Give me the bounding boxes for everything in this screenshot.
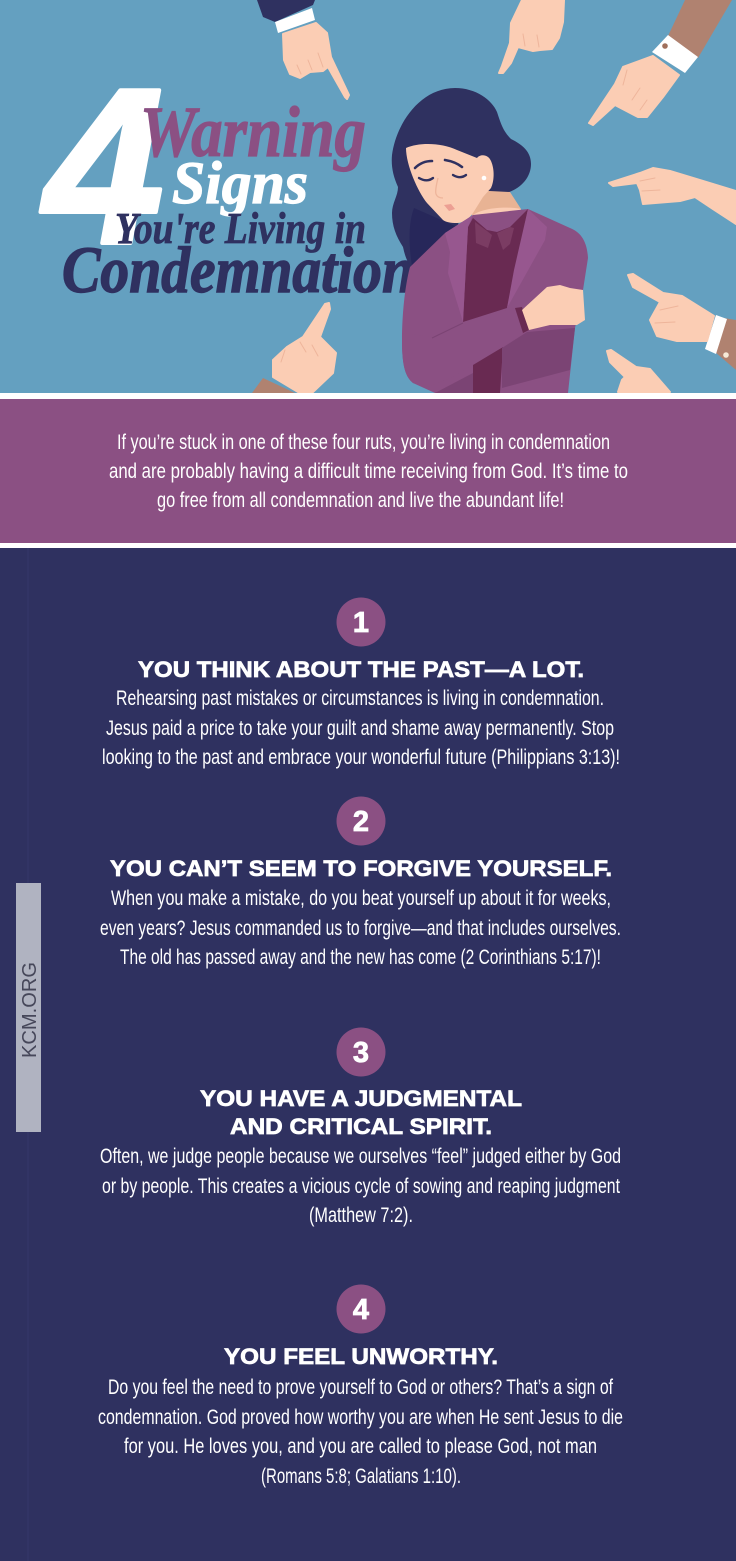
shirt collar: [475, 222, 514, 250]
title line You're Living in: You're Living in: [115, 204, 366, 253]
eyebrows and eyes: [415, 160, 462, 168]
panel: blue header banner: [0, 0, 736, 393]
panel: white page backing: [0, 0, 736, 548]
number badge 1: [336, 598, 386, 646]
icon: pointing hand right lower: [628, 274, 736, 370]
title word Condemnation: Condemnation: [62, 234, 414, 307]
number badge 2: 2: [353, 806, 369, 838]
heading 1: YOU THINK ABOUT THE PAST—A LOT.: [138, 657, 584, 682]
icon: pointing hand bottom right: [607, 350, 670, 392]
hair: [392, 88, 531, 268]
intro text: [109, 431, 628, 512]
icon: pointing hand top right: [589, 0, 732, 125]
icon: pointing hand top left: [257, 0, 349, 99]
title word Warning: Warning: [140, 92, 366, 172]
jacket: [402, 209, 588, 393]
tab: KCM.ORG: KCM.ORG: [19, 962, 41, 1058]
body 2: [100, 887, 621, 969]
title word Signs: Signs: [172, 150, 308, 216]
body 4: for you. He loves you, and you are called to please God, not man: [124, 1435, 597, 1458]
title numeral 4: 4: [40, 43, 164, 291]
face: [406, 144, 494, 223]
item 4: [98, 1284, 623, 1488]
heading 3: [200, 1086, 522, 1139]
neck: [470, 190, 521, 232]
number badge 3: 3: [353, 1037, 369, 1069]
earring: [482, 176, 486, 180]
panel: navy background: [0, 548, 736, 1561]
title: [40, 43, 414, 307]
panel: purple intro band: [0, 399, 736, 543]
heading 3: YOU HAVE A JUDGMENTAL: [200, 1086, 522, 1111]
folded arm: [402, 308, 523, 387]
number badge 4: [336, 1284, 386, 1334]
heading 3: AND CRITICAL SPIRIT.: [230, 1114, 492, 1139]
heading 2: YOU CAN’T SEEM TO FORGIVE YOURSELF.: [110, 856, 612, 881]
illustration: woman: [392, 88, 588, 393]
item 2: [100, 796, 621, 969]
cuff: [515, 307, 529, 333]
hand on arm: [522, 285, 585, 330]
number badge 4: 4: [353, 1294, 369, 1326]
shirt: [463, 209, 528, 322]
body 3: (Matthew 7:2).: [309, 1204, 413, 1227]
tab: KCM.ORG: [16, 883, 41, 1132]
item 1: [102, 598, 620, 769]
body 1: [102, 687, 620, 769]
intro text: go free from all condemnation and live the abundant life!: [157, 489, 564, 512]
nose and mouth: [436, 178, 443, 198]
heading 4: YOU FEEL UNWORTHY.: [224, 1344, 498, 1369]
body 4: [98, 1376, 623, 1488]
icon: pointing hand right upper: [609, 168, 736, 224]
body 3: [100, 1145, 621, 1227]
icon: pointing hand top centre: [499, 0, 564, 73]
item 3: [100, 1028, 621, 1227]
number badge 2: [336, 796, 386, 846]
number badge 1: 1: [353, 607, 369, 639]
icon: pointing hand bottom left: [252, 303, 336, 393]
body 4: (Romans 5:8; Galatians 1:10).: [261, 1465, 461, 1488]
lower jacket shadow: [502, 328, 575, 388]
lapels: [445, 215, 473, 322]
number badge 3: [336, 1028, 386, 1076]
